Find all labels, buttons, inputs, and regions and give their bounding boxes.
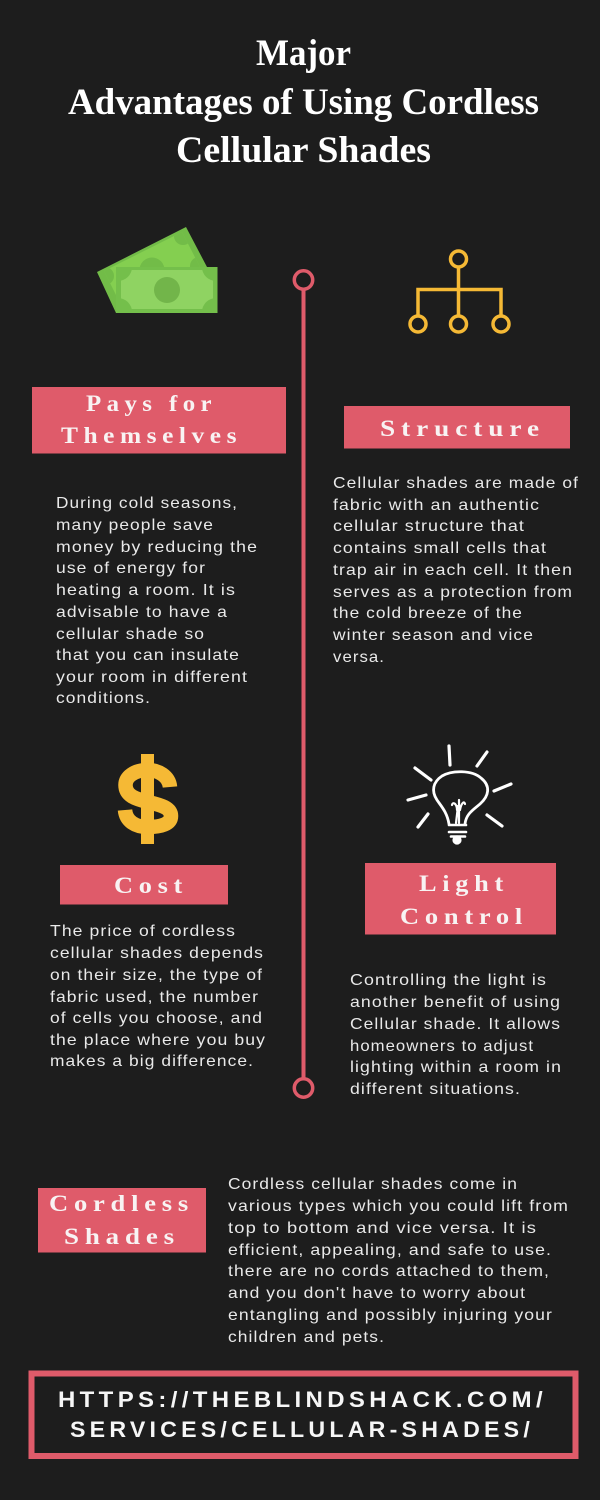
callout: url box: SERVICES/CELLULAR-SHADES/ [70, 1417, 534, 1442]
body text: lighting within a room in [350, 1059, 562, 1076]
heading box [38, 1188, 206, 1252]
body text: on their size, the type of [50, 967, 263, 984]
panel: cordless shades [38, 1176, 569, 1346]
icon: light bulb [408, 746, 511, 843]
heading: Cordless [49, 1191, 194, 1216]
body text [228, 1176, 569, 1346]
body text: Cordless cellular shades come in [228, 1176, 518, 1193]
body text: During cold seasons, [56, 495, 238, 512]
heading [61, 391, 242, 448]
body text: children and pets. [228, 1329, 385, 1346]
body text: another benefit of using [350, 994, 561, 1011]
body text: money by reducing the [56, 539, 258, 556]
body text: and you don't have to worry about [228, 1285, 526, 1302]
body text: entangling and possibly injuring your [228, 1307, 553, 1324]
body text: Cellular shades are made of [333, 475, 579, 492]
body text: of cells you choose, and [50, 1010, 263, 1027]
title: Advantages of Using Cordless [68, 82, 539, 123]
body text: top to bottom and vice versa. It is [228, 1220, 537, 1237]
icon: structure [410, 251, 509, 332]
icon: money [97, 227, 218, 313]
body text: efficient, appealing, and safe to use. [228, 1242, 552, 1259]
heading box [344, 406, 570, 448]
body text: different situations. [350, 1081, 521, 1098]
body text: many people save [56, 517, 214, 534]
body text [332, 475, 579, 666]
body text: cellular shade so [56, 626, 205, 643]
heading box [32, 387, 286, 454]
panel: pays for themselves [32, 387, 286, 707]
body text: versa. [333, 649, 385, 666]
icon: dollar sign [125, 754, 171, 844]
heading: Themselves [61, 423, 242, 448]
body text: various types which you could lift from [228, 1198, 569, 1215]
callout: url box [32, 1374, 576, 1456]
body text: fabric used, the number [50, 989, 259, 1006]
body text: the place where you buy [50, 1032, 266, 1049]
body text [56, 495, 258, 707]
timeline line [294, 271, 313, 1097]
heading: Shades [64, 1224, 180, 1249]
heading: Control [400, 904, 528, 929]
body text: there are no cords attached to them, [228, 1263, 550, 1280]
panel: structure [332, 406, 579, 666]
body text: cellular shades depends [50, 945, 264, 962]
body text: winter season and vice [332, 627, 534, 644]
body text [350, 972, 562, 1098]
heading [400, 871, 528, 929]
body text: The price of cordless [50, 923, 236, 940]
heading: Light [419, 871, 509, 896]
panel: light control [350, 863, 562, 1098]
body text: that you can insulate [56, 647, 240, 664]
body text: conditions. [56, 690, 151, 707]
body text [50, 923, 266, 1070]
title: Cellular Shades [176, 130, 431, 171]
callout: url box: HTTPS://THEBLINDSHACK.COM/ [58, 1387, 547, 1412]
title: Major [256, 33, 351, 74]
body text: fabric with an authentic [333, 497, 540, 514]
body text: contains small cells that [333, 540, 547, 557]
body text: serves as a protection from [333, 584, 573, 601]
panel: cost [50, 865, 266, 1070]
body text: advisable to have a [56, 604, 228, 621]
heading: Structure [380, 416, 545, 441]
heading box [365, 863, 556, 934]
heading: Pays for [86, 391, 217, 416]
title [68, 33, 539, 171]
body text: Controlling the light is [350, 972, 547, 989]
heading: Cost [114, 873, 188, 898]
body text: heating a room. It is [56, 582, 236, 599]
heading box [60, 865, 228, 904]
body text: trap air in each cell. It then [333, 562, 573, 579]
body text: makes a big difference. [50, 1053, 254, 1070]
heading [49, 1191, 194, 1249]
body text: cellular structure that [333, 518, 525, 535]
body text: homeowners to adjust [350, 1038, 534, 1055]
body text: use of energy for [56, 560, 206, 577]
body text: the cold breeze of the [333, 605, 523, 622]
body text: your room in different [56, 669, 248, 686]
body text: Cellular shade. It allows [350, 1016, 561, 1033]
